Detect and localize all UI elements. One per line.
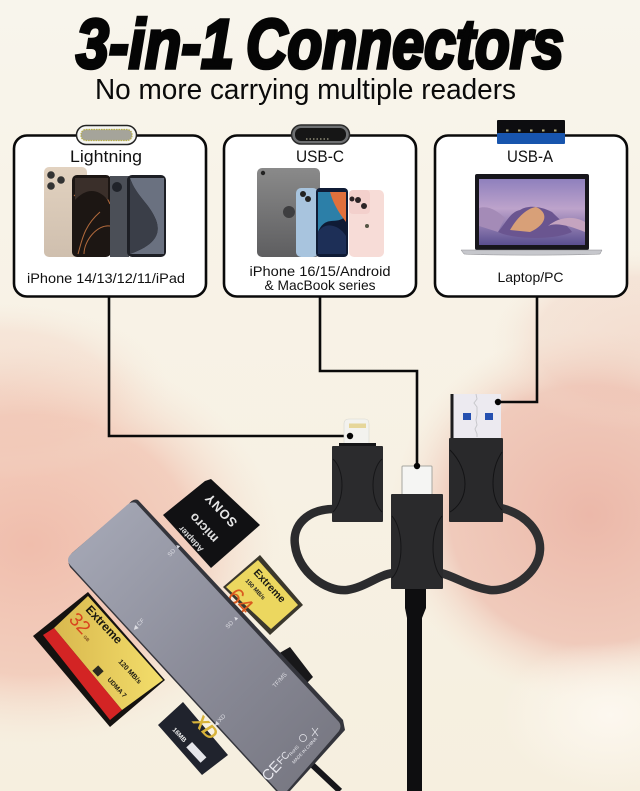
reader port labels: TF/MS (272, 672, 289, 689)
caption: iPhone 16/15/Android and MacBook: iPhone 16/15/Android (250, 263, 390, 279)
caption: iPhone 16/15/Android and MacBook: & MacBook series (264, 277, 376, 293)
regulatory marks: FC (275, 750, 292, 767)
regulatory marks: RoHS (288, 744, 300, 757)
label: USB-A: USB-A (507, 148, 553, 166)
panel: Lightning (14, 126, 206, 296)
connector line: Lightning (109, 297, 350, 436)
image: iPhones (44, 167, 166, 257)
card: Extreme 32GB CF (33, 592, 165, 727)
connector line: USB-C (320, 297, 417, 466)
usb cable of reader (307, 760, 340, 791)
cable: 3-in-1 branches (295, 508, 540, 791)
icon: Lightning port (76, 126, 136, 144)
card: Extreme 64GB: Extreme (251, 567, 288, 605)
panel: USB-A (435, 120, 627, 296)
reader port labels: SD ▲ (167, 543, 182, 558)
image: laptop (461, 174, 602, 255)
caption: iPhone models: iPhone 14/13/12/11/iPad (27, 270, 185, 286)
card: SONY SD: SONY (201, 490, 240, 530)
panel: USB-C (224, 125, 416, 296)
regulatory marks: MADE IN CHINA (291, 736, 318, 765)
card: micro slot (276, 647, 313, 690)
title: Connectors (246, 5, 564, 83)
card reader body (68, 500, 345, 791)
dots: connection points (347, 399, 501, 469)
caption: iPhone 16/15/Android and MacBook (250, 263, 390, 293)
connector: USB-C plug (391, 466, 443, 589)
card: Extreme 32GB CF: 32 (64, 609, 94, 639)
label: Lightning: Lightning (70, 148, 142, 166)
card: Extreme 32GB CF: UDMA 7 (106, 677, 128, 700)
card: SONY SD: micro (186, 510, 221, 546)
subtitle: No more carrying multiple readers (95, 74, 516, 106)
reader port labels (132, 543, 289, 728)
icon: USB-C port (292, 125, 350, 144)
reader port labels: SD ▲ (225, 615, 240, 630)
card: xD 16MB (158, 702, 228, 775)
card: xD 16MB: 16MB (171, 727, 188, 744)
title: 3-in-1 (76, 5, 234, 83)
card: SONY SD: Adapter (176, 524, 205, 554)
card: Extreme 64GB: 150 MB/s (244, 578, 266, 602)
image: iPad and iPhones (257, 168, 384, 257)
caption: Laptop/PC: Laptop/PC (498, 269, 564, 285)
card: Extreme 64GB (222, 555, 303, 635)
card: xD 16MB: XD (188, 710, 222, 745)
card: Extreme 32GB CF: Extreme (83, 602, 126, 647)
reader port labels: ◀ CF (132, 618, 146, 632)
card: Extreme 64GB: 64 (222, 583, 259, 619)
icon: USB-A port (497, 120, 565, 144)
connector line: USB-A (498, 297, 537, 402)
connector: Lightning plug (332, 419, 383, 522)
regulatory marks: CE (258, 758, 285, 785)
reader port labels: ◀ XD (213, 713, 228, 728)
card: Extreme 32GB CF: GB (82, 634, 91, 643)
card: Extreme 32GB CF: 120 MB/s (117, 659, 142, 686)
connector: USB-A plug (449, 394, 503, 522)
label: USB-C: USB-C (296, 148, 344, 166)
title (76, 5, 564, 83)
card: SONY SD (163, 479, 260, 568)
regulatory marks (258, 728, 318, 785)
